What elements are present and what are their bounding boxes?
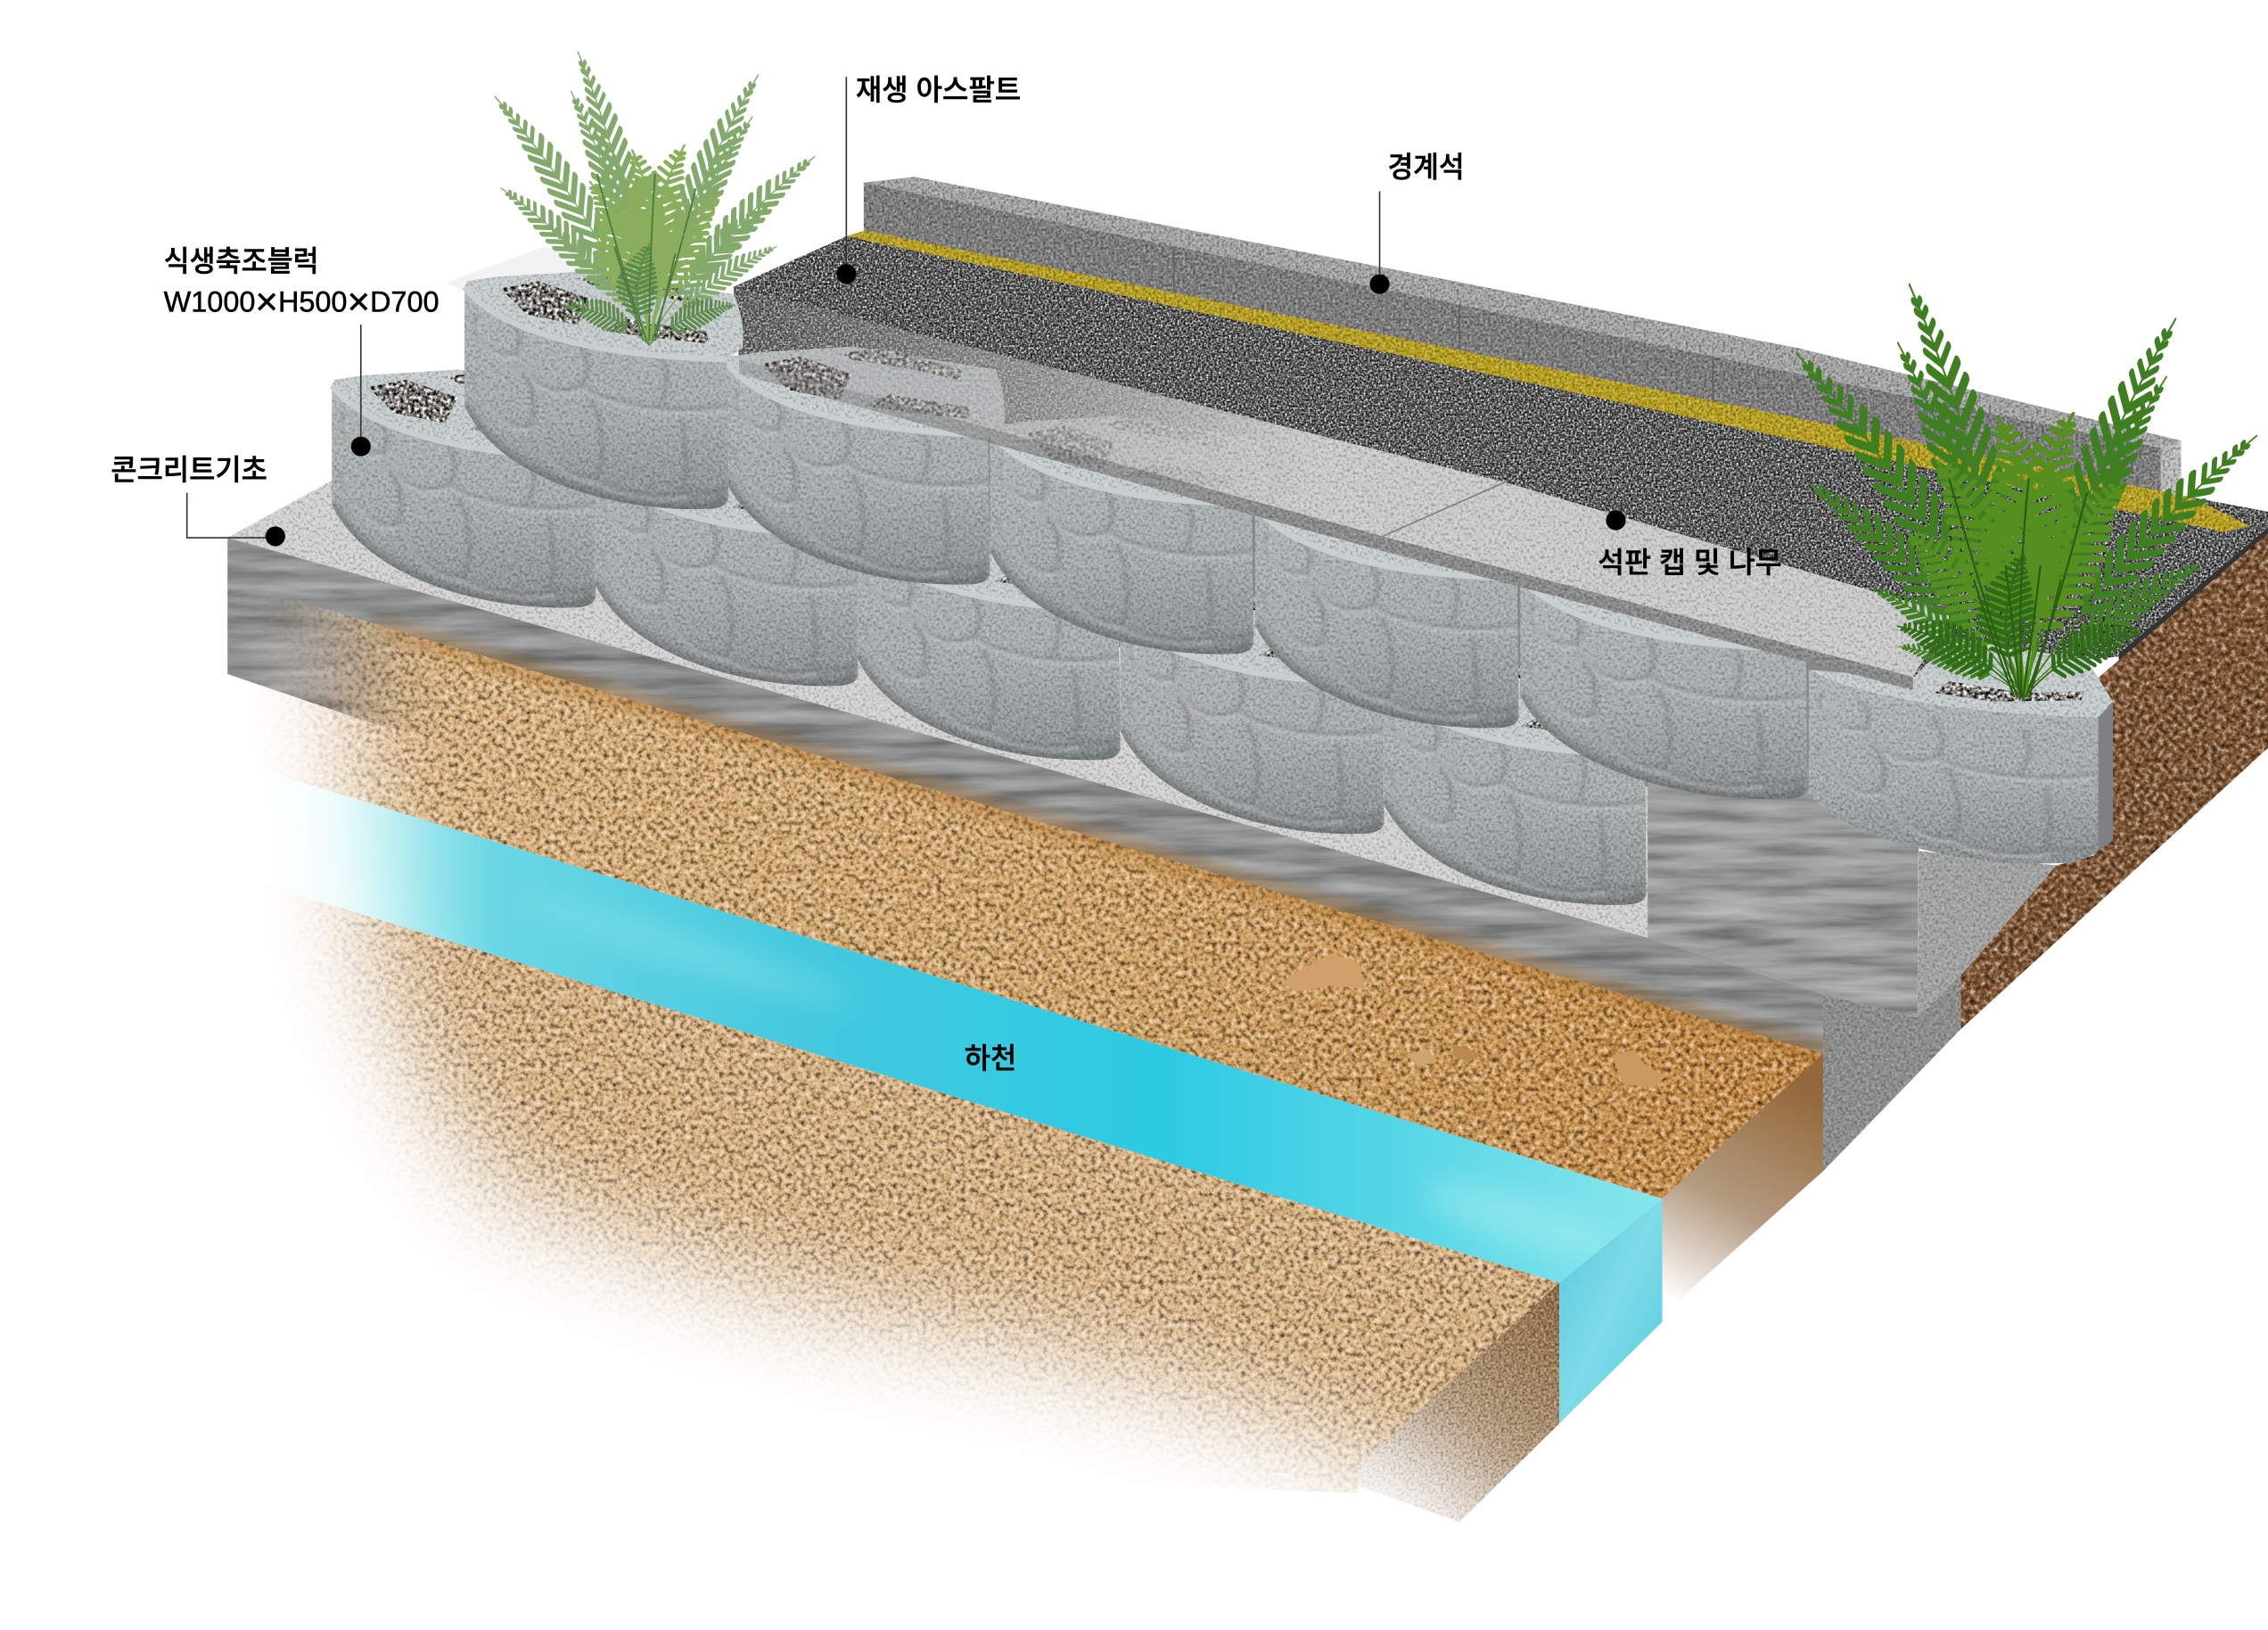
upper soil bank [218,577,1823,1198]
yellow road line [846,230,2250,532]
lower soil cut face [1358,1283,1559,1522]
lower row of vegetation blocks [332,370,1662,905]
label: curb stone [1369,151,1465,294]
upper row of vegetation blocks [726,347,2113,863]
end block with planter [1809,638,2113,863]
label: vegetation block: D700 [370,286,440,318]
label: curb stone: 경계석 [1387,151,1465,183]
stone cap slab [734,287,1952,690]
label: vegetation block [164,245,440,457]
lower soil bank [218,869,1559,1493]
label: stone cap and tree [1598,511,1782,579]
concrete foundation [227,480,2057,1171]
label: vegetation block: W1000 [164,286,256,318]
label: vegetation block: H500 [278,286,347,318]
fern plant right [1790,275,2262,704]
shaded backing behind the blocks [726,359,1919,851]
label: recycled asphalt [836,74,1021,284]
fern plant left [490,46,818,349]
upper soil cut face [1663,1054,1823,1322]
label: vegetation block: × [347,280,370,324]
recycled asphalt pavement [734,230,2268,677]
label: vegetation block: × [255,280,278,324]
label: stone cap and tree: 석판 캡 및 나무 [1598,547,1782,579]
label: concrete foundation: 콘크리트기초 [111,454,267,486]
top-left vegetation block [464,271,744,509]
brown soil at right [1960,533,2268,1029]
label: recycled asphalt: 재생 아스팔트 [856,74,1021,106]
rocks [1281,954,1666,1087]
ground soil and river, fading to white [218,577,1823,1522]
label: vegetation block: 식생축조블럭 [164,245,319,277]
label: concrete foundation [111,454,285,547]
curb stone [864,177,2181,494]
label: river: 하천 [965,1042,1016,1074]
river water surface [306,784,1662,1282]
river cross-section [1559,1198,1663,1423]
faint slab behind top block [447,246,609,297]
